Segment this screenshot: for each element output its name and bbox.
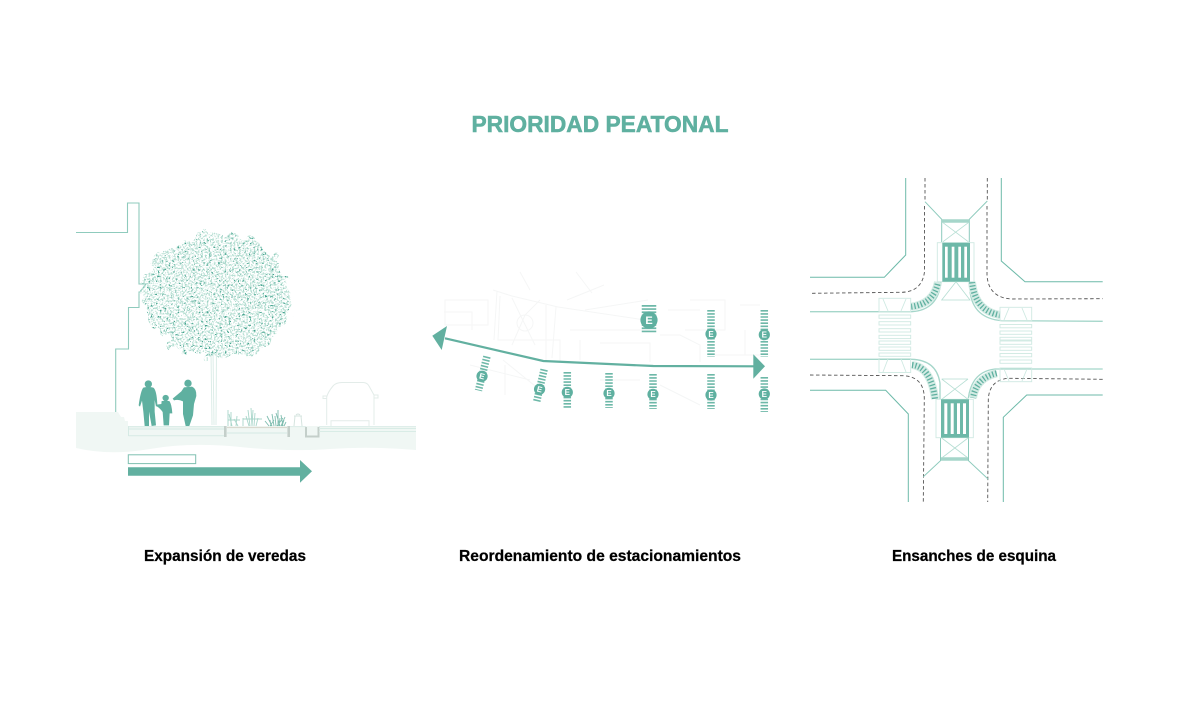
base map xyxy=(444,272,760,405)
parking marker rotated: E xyxy=(478,371,486,382)
sidewalk layers xyxy=(128,426,224,436)
panel: parking map xyxy=(432,272,770,412)
parking marker xyxy=(562,372,573,409)
adult left xyxy=(139,380,157,426)
parking marker xyxy=(603,373,615,408)
parking marker large xyxy=(640,305,658,334)
panel: street section xyxy=(76,203,416,483)
parking marker rotated xyxy=(531,368,550,404)
planter xyxy=(227,408,287,433)
parking marker large: E xyxy=(645,315,653,327)
caption: left: Expansión de veredas xyxy=(144,548,306,565)
parking marker xyxy=(759,310,770,357)
child xyxy=(156,395,172,425)
trash bin xyxy=(294,414,302,426)
top raised crossing xyxy=(925,201,987,300)
expansion arrow xyxy=(128,460,312,483)
tree canopy dark foliage xyxy=(142,233,290,357)
dashed lane lines xyxy=(810,178,1103,502)
parking marker xyxy=(647,374,659,409)
title: PRIORIDAD PEATONAL xyxy=(472,111,728,137)
parking marker: E xyxy=(606,389,612,398)
parking marker: E xyxy=(708,391,714,400)
curbs and drain xyxy=(225,426,318,437)
parking marker: E xyxy=(565,388,571,397)
caption: right: Ensanches de esquina xyxy=(892,548,1056,565)
pedestrians: family silhouettes xyxy=(139,380,196,426)
tree canopy light foliage xyxy=(142,233,290,357)
adult right xyxy=(173,380,196,426)
route arrow xyxy=(432,326,765,379)
inner curb lines xyxy=(810,282,1103,399)
parking marker xyxy=(705,374,717,409)
tree xyxy=(142,233,290,425)
road xyxy=(290,427,416,432)
building outline xyxy=(76,203,146,412)
previous sidewalk width bar xyxy=(128,455,196,464)
caption: center: Reordenamiento de estacionamientos xyxy=(459,548,741,565)
corner planting xyxy=(911,282,1000,399)
car xyxy=(323,382,378,426)
parking marker: E xyxy=(708,330,714,339)
parking marker: E xyxy=(650,390,656,399)
parking marker xyxy=(759,377,770,412)
parking marker xyxy=(705,310,717,357)
parking marker: E xyxy=(762,330,768,340)
right side crossing xyxy=(1000,307,1032,382)
left side crossing xyxy=(879,298,911,372)
parking marker: E xyxy=(762,390,768,399)
outer building lines xyxy=(810,178,1103,502)
panel: intersection plan xyxy=(810,178,1103,502)
tree trunk xyxy=(211,350,216,425)
parking marker rotated xyxy=(473,355,492,392)
ground xyxy=(76,412,416,452)
bottom raised crossing xyxy=(923,379,988,479)
parking marker rotated: E xyxy=(536,385,544,395)
